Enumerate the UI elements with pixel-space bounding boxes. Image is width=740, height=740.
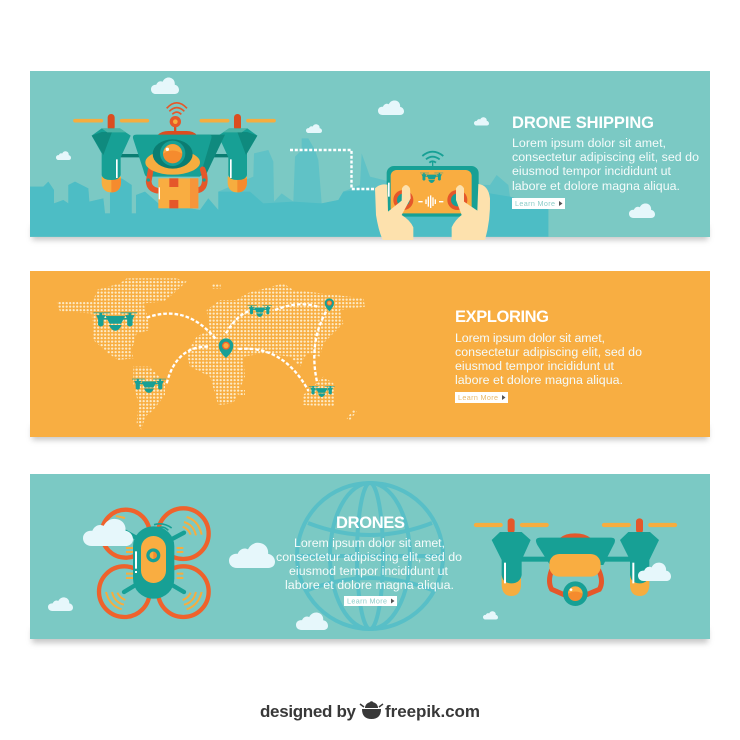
left hand <box>375 184 413 240</box>
camera <box>563 581 588 606</box>
dotted eurasia and africa <box>187 283 365 405</box>
body text <box>276 536 462 592</box>
body text: eiusmod tempor incididunt ut <box>289 564 449 578</box>
body text: labore et dolore magna aliqua. <box>285 578 454 592</box>
gripper arms <box>549 570 602 595</box>
dashed link line <box>290 150 374 189</box>
body text: labore et dolore magna aliqua. <box>455 373 623 387</box>
body text <box>512 136 699 193</box>
globe <box>297 483 443 629</box>
right hand <box>452 184 490 240</box>
propellers <box>75 114 274 131</box>
heading: DRONES <box>336 514 405 532</box>
centre body <box>197 135 225 177</box>
learn more button: Learn More <box>458 393 498 402</box>
icon: freepik mascot <box>360 701 383 719</box>
body text: Lorem ipsum dolor sit amet, <box>455 331 605 345</box>
rotor rings <box>99 508 209 617</box>
parcel <box>147 178 206 208</box>
orange housing <box>549 554 601 577</box>
panel: exploring <box>30 271 710 440</box>
struts <box>123 530 184 592</box>
remote controller in hands <box>375 152 490 240</box>
learn more button: Learn More <box>515 199 555 208</box>
drone front view <box>476 518 675 606</box>
map pin large <box>219 338 233 358</box>
footer credit: designed by <box>260 702 357 721</box>
heading: EXPLORING <box>455 308 549 326</box>
gripper arms <box>149 169 205 191</box>
body text: Lorem ipsum dolor sit amet, <box>294 536 445 550</box>
map pin small <box>325 298 334 311</box>
dotted australia <box>303 377 335 407</box>
body text: consectetur adipiscing elit, sed do <box>455 345 642 359</box>
motor pods <box>492 532 659 596</box>
signal icon <box>422 152 443 163</box>
centre body <box>560 533 591 538</box>
city skyline <box>30 138 548 237</box>
dotted south america <box>133 367 165 430</box>
antenna with signal <box>158 103 197 135</box>
learn more button <box>344 596 397 606</box>
controller body <box>387 162 479 217</box>
panel: drone shipping <box>30 71 710 240</box>
body text: eiusmod tempor incididunt ut <box>512 164 672 178</box>
panel: drones <box>30 474 710 643</box>
heading: DRONE SHIPPING <box>512 114 654 132</box>
body text: Lorem ipsum dolor sit amet, <box>512 136 666 150</box>
dotted continents <box>57 278 187 360</box>
propellers <box>476 518 675 533</box>
drone carrying a parcel <box>75 103 274 208</box>
footer credit: freepik.com <box>385 702 480 721</box>
learn more button <box>455 392 508 403</box>
body text: labore et dolore magna aliqua. <box>512 179 680 193</box>
body text: consectetur adipiscing elit, sed do <box>276 550 462 564</box>
clouds <box>48 519 671 630</box>
arm bars <box>520 557 632 562</box>
dotted islands <box>212 284 357 420</box>
body text: consectetur adipiscing elit, sed do <box>512 150 699 164</box>
motor pods <box>92 128 257 192</box>
learn more button: Learn More <box>347 596 387 606</box>
world map <box>57 278 365 430</box>
drone markers <box>93 305 335 397</box>
camera <box>145 139 200 175</box>
quadcopter top view <box>99 508 209 617</box>
body text: eiusmod tempor incididunt ut <box>455 359 615 373</box>
rotor blur arcs <box>106 516 202 609</box>
orange core <box>141 536 166 583</box>
learn more button <box>512 198 565 209</box>
dashed routes <box>147 304 326 391</box>
arm bars <box>120 154 230 157</box>
body <box>133 526 174 599</box>
footer credit <box>260 701 480 721</box>
clouds <box>56 78 655 218</box>
body text <box>455 331 642 387</box>
camera <box>146 548 160 562</box>
